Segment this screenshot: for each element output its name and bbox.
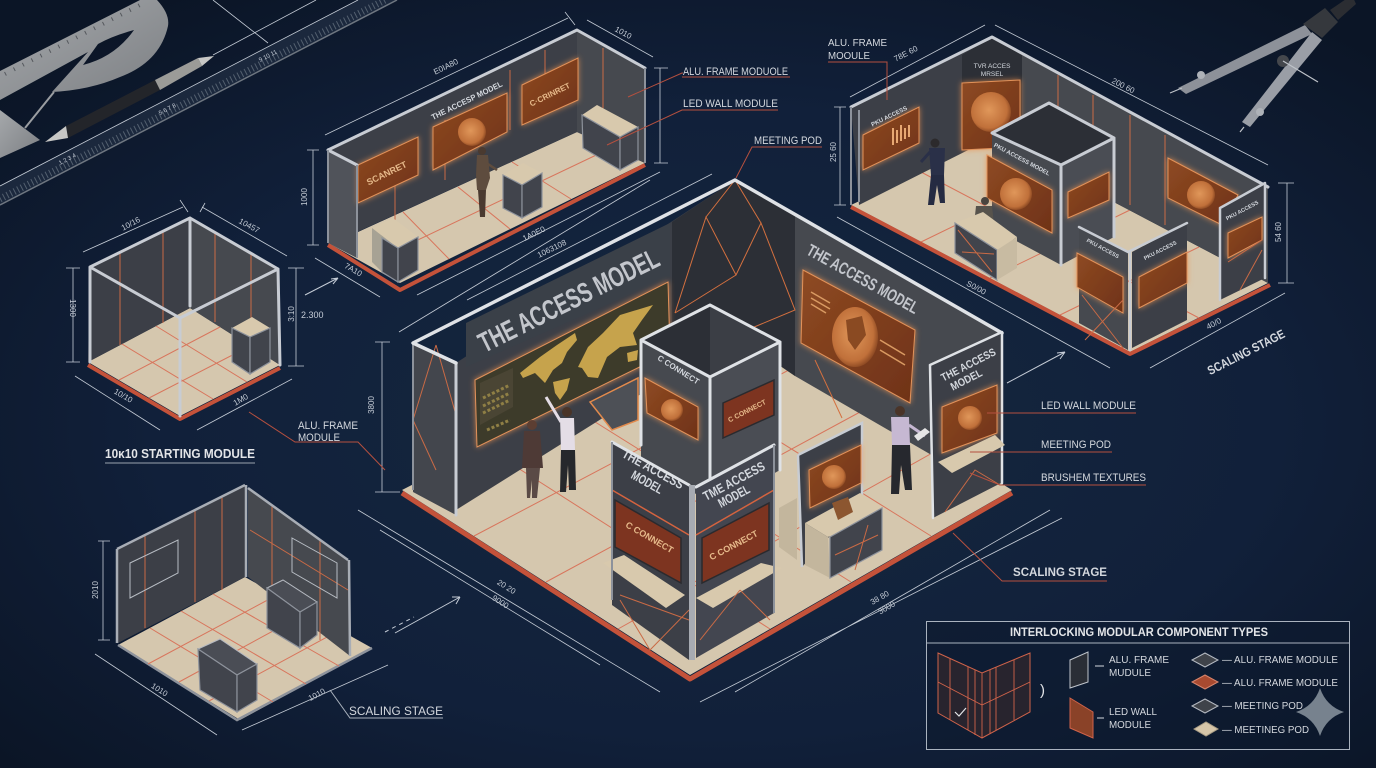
callout: meeting pod (top centre): MEETING POD xyxy=(754,135,822,147)
callout: alu. frame module (left): ALU. FRAME xyxy=(298,420,358,432)
dimensions: 1063108 xyxy=(536,238,568,260)
right end panel with shelf: MODEL xyxy=(949,367,985,393)
central pod xyxy=(987,103,1114,265)
corner pod xyxy=(1077,223,1187,350)
floor xyxy=(402,320,1012,675)
left end panel xyxy=(413,343,456,515)
dimensions: 54 60 xyxy=(1274,221,1283,242)
angled floor panel under map xyxy=(590,378,638,430)
pod box front xyxy=(198,639,257,712)
arrow: scaling direction xyxy=(1007,352,1065,383)
plinth xyxy=(851,207,1270,354)
front corner pod: TME ACCESS xyxy=(700,458,768,504)
corner pod: PKU ACCESS xyxy=(1085,238,1120,260)
callout: alu. frame module (left): MODULE xyxy=(298,432,340,444)
legend item: frame module: MUDULE xyxy=(1109,667,1151,679)
booth: top right scaling stage xyxy=(829,25,1294,368)
dimensions xyxy=(358,180,1062,702)
LED screens: SCANRET xyxy=(365,159,409,187)
pencil xyxy=(45,56,214,142)
floor xyxy=(328,132,645,283)
dimensions: 78E 60 xyxy=(893,44,920,64)
callout: alu. frame module (left) xyxy=(249,412,385,470)
dimensions: 1A0E0 xyxy=(521,224,547,243)
label: scaling stage (rotated): SCALING STAGE xyxy=(1205,327,1287,378)
dimensions: 2.300 xyxy=(301,310,324,320)
dimensions: 1010 xyxy=(613,25,634,41)
corner shading xyxy=(672,180,795,376)
wall outline screens xyxy=(130,538,337,598)
walls xyxy=(88,218,190,362)
callout: brushem textures: BRUSHEM TEXTURES xyxy=(1041,472,1146,484)
callout: alu. frame module (top right) xyxy=(828,37,887,100)
wall screens: TVR ACCES xyxy=(974,63,1011,70)
callout: led wall module (right): LED WALL MODULE xyxy=(1041,400,1136,412)
back-left wall xyxy=(456,180,735,510)
walls xyxy=(117,485,245,643)
right-hand person xyxy=(891,406,930,494)
title: 10x10 starting module: 10κ10 STARTING MODULE xyxy=(105,447,255,461)
dimensions: S0/00 xyxy=(965,279,988,297)
legend item: led wall module xyxy=(1070,698,1157,738)
centre pod: C CONNECT xyxy=(656,353,701,386)
dimensions: 20 20 xyxy=(495,578,518,596)
walls xyxy=(328,30,577,232)
LED wall: world map xyxy=(475,282,670,447)
label: scaling stage (lower left): SCALING STAGE xyxy=(349,704,443,718)
front corner pod: C CONNECT xyxy=(708,528,760,562)
dimensions: 1M0 xyxy=(232,392,250,408)
interlocking panel diagram: ) xyxy=(1040,682,1045,699)
legend item: led wall module: MODULE xyxy=(1109,719,1151,731)
compass xyxy=(1170,0,1356,132)
centre pod: C CONNECT xyxy=(727,399,768,424)
front corner pod: MODEL xyxy=(715,481,752,511)
dimensions: 10457 xyxy=(237,217,262,235)
legend swatches and labels xyxy=(1192,653,1338,736)
right header text: THE ACCESS MODEL xyxy=(803,241,922,318)
dimensions: 9000 xyxy=(490,593,511,611)
floor xyxy=(118,577,372,720)
legend swatches and labels: — MEETING POD xyxy=(1222,700,1303,712)
dimensions: 1000 xyxy=(300,188,309,206)
back-right wall xyxy=(735,180,1002,457)
callout: meeting pod (right): MEETING POD xyxy=(1041,439,1111,451)
plinth xyxy=(88,365,280,419)
dimensions: 10/10 xyxy=(112,387,135,405)
dimensions: 38 80 xyxy=(869,589,891,607)
booth: lower-left scaling stage xyxy=(91,485,414,735)
callout: meeting pod (top centre) xyxy=(736,135,822,178)
dimensions: 3:10 xyxy=(287,306,296,322)
dimensions xyxy=(829,25,1294,368)
dimensions: 3000 xyxy=(877,599,897,616)
right end panel with shelf xyxy=(930,332,1005,518)
dimensions: 10/16 xyxy=(120,215,142,232)
set square xyxy=(0,0,168,158)
tools: set square, pencil and ruler xyxy=(0,0,397,205)
header panel with title: THE ACCESS MODEL xyxy=(473,242,664,359)
frame xyxy=(328,30,645,165)
LED screens: C·CRINRET xyxy=(528,81,572,108)
desk and seated person xyxy=(955,197,1017,280)
legend title: INTERLOCKING MODULAR COMPONENT TYPES xyxy=(1010,627,1268,639)
centre pod xyxy=(641,305,780,510)
dimensions xyxy=(91,541,414,735)
dimensions: E0IA80 xyxy=(432,57,460,77)
booth: 10x10 starting module xyxy=(66,200,324,430)
callout: scaling stage (centre) xyxy=(953,533,1107,581)
legend panel xyxy=(926,622,1350,750)
dimensions: 7A10 xyxy=(343,261,364,279)
wall screens: PKU ACCESS xyxy=(871,106,908,128)
wall screens xyxy=(863,63,1238,225)
callout: led wall module (top centre) xyxy=(607,98,778,145)
ruler: 5 6 7 8 xyxy=(158,103,178,117)
frame xyxy=(851,37,1268,187)
frame top xyxy=(117,485,350,656)
pod box rear xyxy=(267,580,317,648)
ruler xyxy=(0,0,397,205)
header text: THE ACCESP MODEL xyxy=(430,80,504,122)
ruler: 1 2 3 4 xyxy=(58,153,78,167)
legend swatches and labels: — ALU. FRAME MODULE xyxy=(1222,677,1338,689)
front corner pod: C CONNECT xyxy=(624,520,676,555)
callout: alu. frame module (top centre) xyxy=(628,66,790,97)
person standing xyxy=(921,138,945,205)
corner pod: PKU ACCESS xyxy=(1143,240,1178,262)
dimensions: 1010 xyxy=(307,686,327,703)
dimensions: 1300 xyxy=(68,299,77,317)
dimensions: 2010 xyxy=(91,581,100,599)
storage box xyxy=(232,317,270,374)
plinth xyxy=(328,165,645,290)
main wall frame top xyxy=(413,180,1002,363)
booth: top centre linear module xyxy=(300,12,712,300)
dimensions: 200 60 xyxy=(1110,76,1137,96)
central pod: PKU ACCESS MODEL xyxy=(992,143,1051,178)
callout: brushem textures xyxy=(970,472,1146,485)
person xyxy=(476,147,497,217)
plinth xyxy=(402,493,1012,679)
callout: alu. frame module (top right): ALU. FRAME xyxy=(828,37,887,49)
front corner pod: THE ACCESS xyxy=(620,446,687,492)
counter pod xyxy=(779,423,882,578)
callout: scaling stage (centre): SCALING STAGE xyxy=(1013,565,1107,579)
label: scaling stage (lower left) xyxy=(330,690,443,718)
arrow: small scaling direction xyxy=(305,278,338,295)
wall accent lines xyxy=(675,180,842,418)
sparkle watermark xyxy=(1296,688,1344,736)
main booth: the access model xyxy=(358,180,1062,702)
people at map xyxy=(522,397,576,498)
walls xyxy=(851,37,992,205)
interlocking panel diagram xyxy=(938,653,1045,738)
right end panel: PKU ACCESS xyxy=(1225,200,1260,222)
legend item: frame module xyxy=(1070,652,1169,688)
dimensions xyxy=(66,200,324,430)
aluminium frame xyxy=(90,218,280,416)
floor xyxy=(851,138,1268,352)
dimensions xyxy=(300,12,712,300)
LED wall: globe xyxy=(801,270,915,403)
legend item: frame module: ALU. FRAME xyxy=(1109,654,1169,666)
callout: alu. frame module (top centre): ALU. FRAME MODUOLE xyxy=(683,66,788,78)
legend swatches and labels: — ALU. FRAME MODULE xyxy=(1222,654,1338,666)
front corner pod xyxy=(603,442,782,660)
right end panel with shelf: THE ACCESS xyxy=(939,346,998,384)
wall screens: MRSEL xyxy=(981,71,1004,78)
boxes xyxy=(372,105,638,282)
ruler: 9 10 11 xyxy=(258,49,279,64)
dimensions: 3800 xyxy=(367,396,376,414)
dimensions: 25 60 xyxy=(829,141,838,162)
dimensions: 40/0 xyxy=(1205,316,1223,331)
header panel with title xyxy=(466,223,670,367)
dimensions: 1010 xyxy=(149,681,170,699)
callout: alu. frame module (top right): MOOULE xyxy=(828,50,870,62)
LED screens xyxy=(358,58,578,203)
right end panel xyxy=(1220,183,1265,300)
legend item: led wall module: LED WALL xyxy=(1109,706,1157,718)
front corner pod: MODEL xyxy=(629,467,666,497)
floor xyxy=(88,308,280,416)
legend swatches and labels: — MEETINEG POD xyxy=(1222,724,1309,736)
callout: led wall module (top centre): LED WALL MODULE xyxy=(683,98,778,110)
